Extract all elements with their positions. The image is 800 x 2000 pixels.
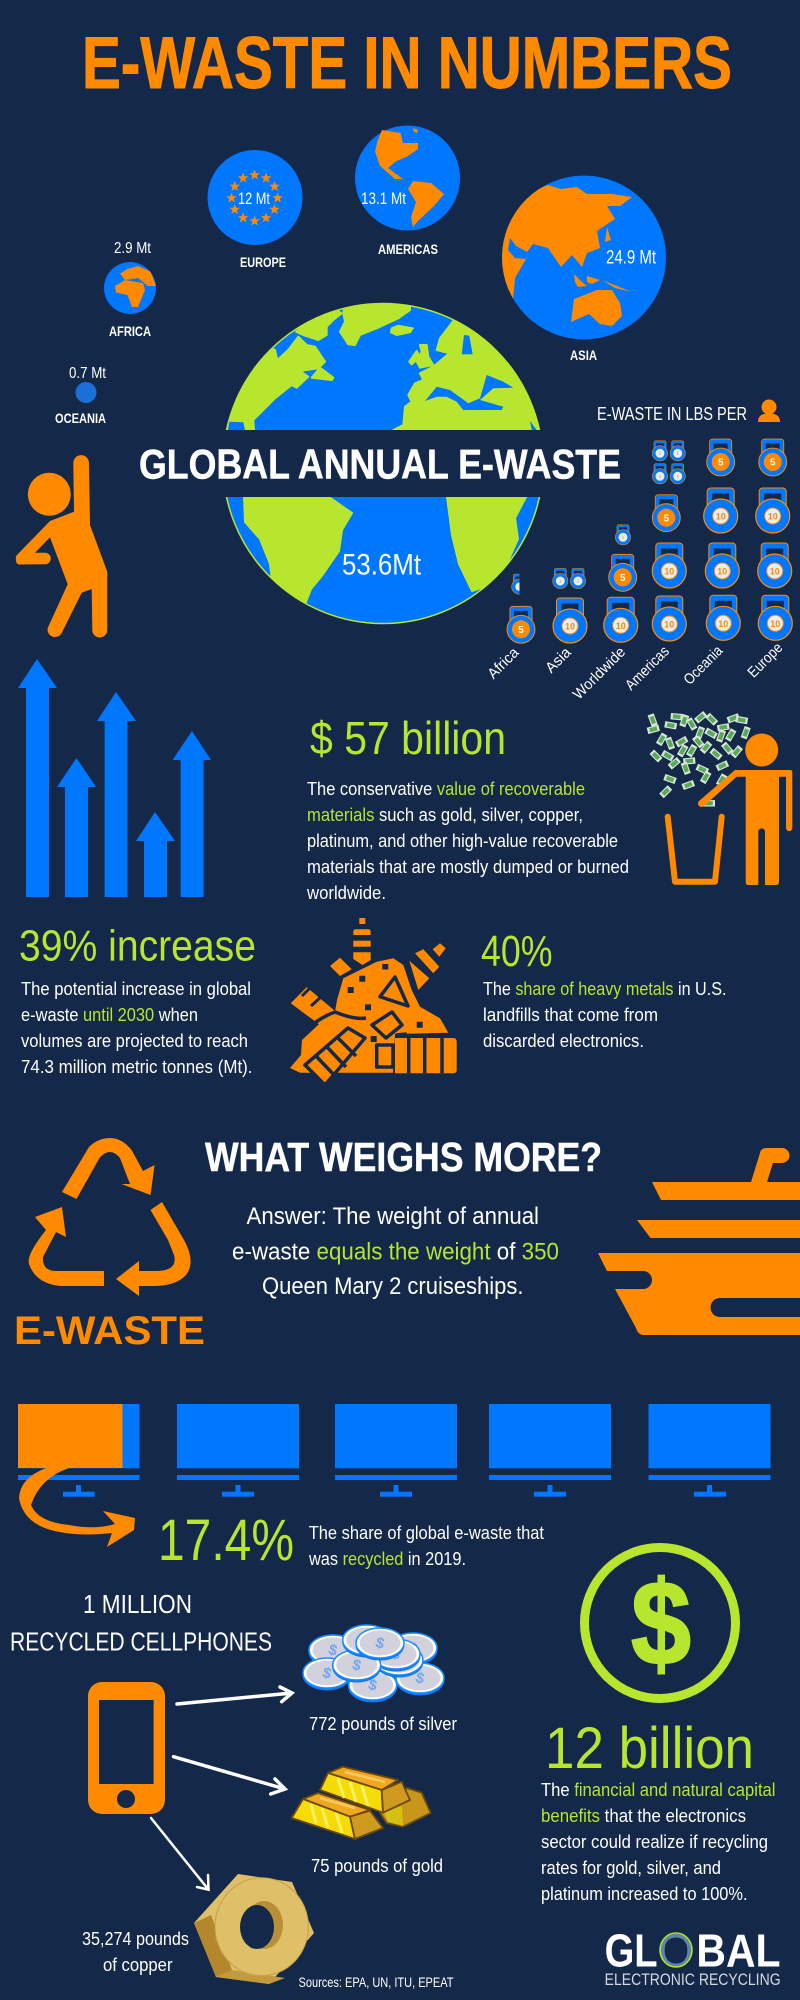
axis labels: Africa <box>484 644 523 682</box>
answer text <box>232 1203 559 1300</box>
stat heading: 12 billion <box>545 1716 754 1781</box>
heading: what weighs more: WHAT WEIGHS MORE? <box>205 1134 602 1180</box>
column: Oceania: 10 <box>718 619 728 629</box>
icon: stretching person <box>16 455 107 638</box>
icon: copper nut <box>194 1874 314 1984</box>
icon: smartphone <box>88 1682 165 1814</box>
monitor 3 <box>335 1404 457 1497</box>
stat heading: 39% increase <box>19 922 256 971</box>
axis labels: Americas <box>622 643 673 694</box>
stat value: 17.4% <box>158 1508 294 1573</box>
value: Oceania: 0.7 Mt <box>69 365 106 382</box>
chart: e-waste in lbs per person <box>484 400 792 703</box>
icon: ring of EU stars <box>226 170 283 226</box>
stat description: platinum increased to 100%. <box>541 1884 748 1904</box>
axis labels: Europe <box>744 639 786 681</box>
arrow: curved orange arrow <box>19 1468 135 1547</box>
chart heading: E-WASTE IN LBS PER <box>597 404 747 424</box>
column: Africa <box>507 574 535 643</box>
stat description: landfills that come from <box>483 1005 658 1025</box>
column: Europe: 10 <box>768 512 778 522</box>
stat description: The share of heavy metals in U.S. <box>483 979 726 999</box>
stat description: was recycled in 2019. <box>308 1549 466 1569</box>
globe: Americas <box>355 126 460 230</box>
column: Asia: 10 <box>565 622 575 632</box>
column: Asia <box>553 568 587 643</box>
icon: silver coins: $ <box>366 1676 379 1695</box>
icon: gold bars <box>292 1767 431 1839</box>
column: Americas: 1 <box>677 452 679 456</box>
stat: 17.4% <box>158 1508 544 1573</box>
answer text: Queen Mary 2 cruiseships. <box>262 1273 524 1300</box>
icon: dollar coin <box>584 1548 736 1698</box>
icon: person throwing money into bin <box>647 711 792 885</box>
logo: Global Electronic Recycling: O <box>658 1925 694 1977</box>
value: Europe: 12 Mt <box>238 189 270 208</box>
monitor 1 <box>18 1404 140 1497</box>
arrow: phone to silver <box>177 1687 292 1704</box>
stat description: platinum, and other high-value recoverable <box>307 831 618 851</box>
globe lower half <box>226 497 540 624</box>
trash bin <box>668 817 722 882</box>
stat description <box>306 779 629 903</box>
monitor 5 <box>648 1404 770 1497</box>
column: Worldwide: 5 <box>620 573 626 584</box>
chart: monitors showing recycled share <box>18 1404 770 1497</box>
icon: silver coins: $ <box>327 1641 340 1660</box>
icon: silver coins: $ <box>414 1669 427 1688</box>
value: Africa: 2.9 Mt <box>114 240 151 257</box>
answer text: Answer: The weight of annual <box>246 1203 539 1230</box>
label: Africa: AFRICA <box>109 323 151 339</box>
globe: Oceania <box>76 382 96 403</box>
icon: person <box>758 400 780 422</box>
stat heading: 40% <box>481 927 552 976</box>
answer text: e-waste equals the weight of 350 <box>232 1238 559 1266</box>
column: Americas: 1 <box>659 452 661 456</box>
globe: Asia <box>490 176 666 340</box>
text: gold amount: 75 pounds of gold <box>311 1856 443 1876</box>
column: Africa: 5 <box>518 625 524 636</box>
icon: silver coins: $ <box>374 1634 387 1653</box>
icon: cruise ship <box>598 1148 800 1335</box>
heading: 1 million recycled cellphones: 1 MILLION <box>83 1589 192 1619</box>
landfill debris details <box>300 977 442 1085</box>
icon: silver coins: $ <box>321 1664 334 1683</box>
icon: silver coins: $ <box>350 1656 363 1675</box>
column: Americas: 10 <box>664 620 674 630</box>
globe: global e-waste <box>223 303 545 624</box>
column: Europe: 10 <box>770 566 780 576</box>
stat description <box>308 1523 544 1569</box>
arrow: phone to copper <box>151 1818 208 1890</box>
column: Americas: 1 <box>659 475 661 479</box>
value: Asia: 24.9 Mt <box>606 248 657 268</box>
column: Americas: 10 <box>664 566 674 576</box>
stat description: 74.3 million metric tonnes (Mt). <box>21 1057 252 1077</box>
stat description: materials that are mostly dumped or burned <box>307 857 629 877</box>
text: copper amount: of copper <box>103 1955 172 1975</box>
icon: recycling arrows <box>29 1138 191 1296</box>
recycled portion highlight <box>18 1404 122 1468</box>
axis labels: Oceania <box>680 642 727 688</box>
stat description: The potential increase in global <box>21 979 251 999</box>
column: Worldwide: 1 <box>622 536 624 540</box>
money bills <box>647 711 751 806</box>
column: Worldwide: 10 <box>616 621 626 631</box>
column: Asia: 1 <box>577 579 579 583</box>
value: global total: 53.6Mt <box>342 548 422 582</box>
icon: silver coins: $ <box>393 1651 406 1670</box>
stat: $57 billion <box>306 712 629 903</box>
column: Asia: 1 <box>559 579 561 583</box>
label: Americas: AMERICAS <box>378 241 438 257</box>
value: Americas: 13.1 Mt <box>361 189 406 208</box>
stat description: worldwide. <box>306 883 386 903</box>
stat description: rates for gold, silver, and <box>541 1858 721 1878</box>
globe upper half <box>226 302 540 430</box>
chart: rising blue arrows <box>18 659 211 897</box>
stat heading: $ 57 billion <box>310 712 506 764</box>
stat description: discarded electronics. <box>483 1031 644 1051</box>
logo: Global Electronic Recycling <box>605 1925 781 1989</box>
label: Europe: EUROPE <box>240 254 286 270</box>
arrow: phone to gold <box>174 1757 285 1794</box>
stat description: benefits that the electronics <box>541 1806 746 1826</box>
stat description: The share of global e-waste that <box>309 1523 544 1543</box>
axis labels: Asia <box>542 644 575 677</box>
monitor 2 <box>177 1404 299 1497</box>
logo: Global Electronic Recycling: BAL <box>696 1925 781 1977</box>
icon: silver coins: $ <box>360 1631 373 1650</box>
stat description: The conservative value of recoverable <box>307 779 585 799</box>
globe: Europe <box>208 150 302 245</box>
logo: Global Electronic Recycling: GL <box>605 1925 658 1977</box>
column: Europe: 10 <box>770 619 780 629</box>
stat description: sector could realize if recycling <box>541 1832 768 1852</box>
label: Asia: ASIA <box>570 347 597 363</box>
stat description: volumes are projected to reach <box>21 1031 248 1051</box>
stat description <box>21 979 252 1077</box>
stat: 12 billion <box>541 1716 776 1904</box>
column: Oceania <box>704 439 740 640</box>
text: copper amount: 35,274 pounds <box>82 1929 189 1949</box>
axis labels: Worldwide <box>570 644 629 703</box>
icon: dollar coin: $ <box>631 1557 691 1691</box>
column: Oceania: 10 <box>716 512 726 522</box>
axis labels <box>484 639 786 703</box>
heading: global annual e-waste: GLOBAL ANNUAL E-WASTE <box>139 440 621 488</box>
icon: silver coins: $ <box>407 1639 420 1658</box>
stat description <box>541 1780 776 1904</box>
column: Oceania: 10 <box>717 566 727 576</box>
label: Oceania: OCEANIA <box>55 410 106 426</box>
icon: silver coins: $ <box>390 1645 403 1664</box>
stat description: The financial and natural capital <box>541 1780 776 1800</box>
label: E-WASTE: E-WASTE <box>14 1309 205 1353</box>
column: Oceania: 5 <box>718 458 724 469</box>
globe: Africa <box>104 262 156 314</box>
heading: 1 million recycled cellphones <box>10 1589 272 1657</box>
column: Europe <box>756 439 792 640</box>
stat: 39% increase <box>19 922 256 1077</box>
icon: silver coins <box>302 1625 444 1702</box>
stat: 40% <box>481 927 726 1051</box>
stat description <box>483 979 726 1051</box>
person <box>698 734 792 885</box>
sources: Sources: EPA, UN, ITU, EPEAT <box>298 1974 454 1990</box>
column: Europe: 5 <box>770 458 776 469</box>
monitor 4 <box>489 1404 611 1497</box>
stat description: materials such as gold, silver, copper, <box>307 805 583 825</box>
column: Worldwide <box>604 525 638 642</box>
text: copper amount <box>82 1929 189 1975</box>
column: Americas: 5 <box>664 513 670 524</box>
column: Americas: 1 <box>677 475 679 479</box>
icon: landfill of electronics <box>290 918 457 1085</box>
column: Americas <box>652 441 686 641</box>
heading: 1 million recycled cellphones: RECYCLED CELLPHONES <box>10 1627 272 1657</box>
text: silver amount: 772 pounds of silver <box>309 1714 457 1734</box>
stat description: e-waste until 2030 when <box>21 1005 198 1025</box>
